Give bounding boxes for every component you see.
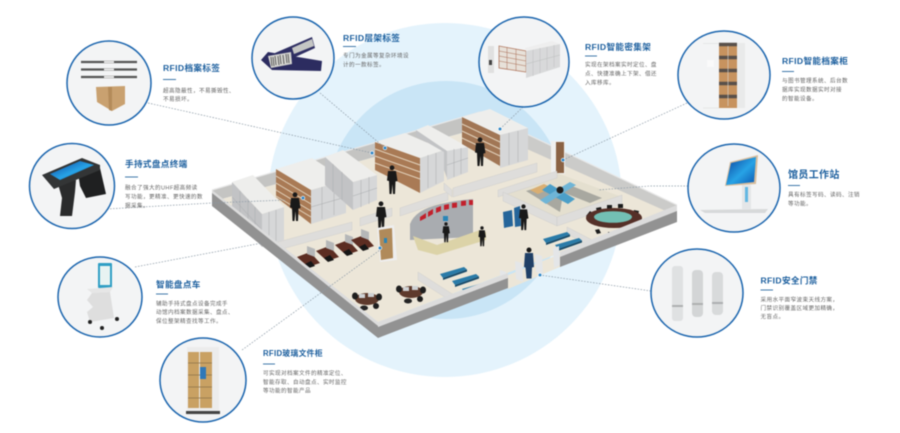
text block: 不易损坏。 <box>163 95 193 103</box>
office room <box>498 171 622 226</box>
connector: inventory cart <box>135 243 262 267</box>
front walls <box>212 190 677 338</box>
icon: archive tag and box <box>67 41 151 125</box>
text block: 辅助手持式盘点设备完成手 <box>156 302 228 308</box>
text block: 动馆内档案数据采集、盘点、 <box>156 308 234 316</box>
text block: 具有标签写码、读码、注销 <box>788 192 860 198</box>
text block: 等功能。 <box>788 200 812 208</box>
shelf D with archive boxes <box>375 133 444 193</box>
text block: 保位整架精查找等工作。 <box>156 317 222 325</box>
text block: 实现在架档案实时定位、盘 <box>585 62 657 68</box>
connector: dense rack <box>500 107 523 129</box>
shelf C closed <box>325 150 377 210</box>
icon: dense rack <box>479 17 569 107</box>
icon: shelf labels <box>252 17 334 99</box>
meeting table <box>586 204 642 236</box>
icon: handheld reader <box>30 144 114 228</box>
door gap floor edge <box>506 254 562 289</box>
panel: RFID archive tag <box>67 41 235 125</box>
heading: RFID安全门禁 <box>760 274 818 286</box>
connector: shelf tag <box>320 93 385 148</box>
low walls around shelf aisles <box>278 163 537 250</box>
reception area <box>410 199 486 255</box>
heading: RFID智能档案柜 <box>782 55 848 66</box>
icon: glass cabinet <box>160 338 246 422</box>
text block: 融合了强大的UHF超高频读 <box>125 186 198 192</box>
heading: 手持式盘点终端 <box>125 158 188 169</box>
panel: handheld inventory terminal <box>30 144 203 228</box>
isometric archive room floor plan <box>212 109 677 338</box>
map location markers <box>301 127 565 277</box>
text block: 可实现对档案文件的精准定位、 <box>263 371 347 377</box>
security gate and visitor <box>500 246 560 284</box>
staff figures near shelves <box>290 137 486 230</box>
kiosks and visitor <box>503 204 528 230</box>
small wooden cabinet <box>551 141 565 174</box>
panel: RFID security gate <box>651 249 838 337</box>
interior partition <box>418 272 457 305</box>
text block: 点、快捷准确上下架、借还 <box>585 70 657 78</box>
text block: 等功能的智能产品 <box>263 386 311 394</box>
icon: inventory cart <box>58 257 142 337</box>
icon: smart cabinet <box>678 31 770 119</box>
heading: RFID档案标签 <box>163 62 220 73</box>
text block: 智能存取、自动盘点、实时监控 <box>263 378 347 386</box>
text block: 超高隐蔽性，不易撕毁性、 <box>163 88 235 94</box>
connector: smart cabinet <box>563 103 687 160</box>
text block: 无盲点。 <box>760 312 784 320</box>
wooden glass cabinet <box>377 225 397 262</box>
panel: RFID glass file cabinet <box>160 338 347 422</box>
text block: 入库移库。 <box>585 78 615 86</box>
connector: handheld terminal <box>107 200 285 209</box>
connector: archive tag <box>148 103 372 153</box>
text block: 门禁识别覆盖区域更加精确， <box>760 304 838 312</box>
text block: 专门为金属等复杂环境设 <box>343 54 409 60</box>
shelf B with archive boxes <box>276 158 346 224</box>
connector: security gate <box>540 275 651 291</box>
icon: security gates <box>651 249 743 337</box>
heading: RFID玻璃文件柜 <box>263 348 323 358</box>
shelf F open <box>462 109 528 168</box>
heading: 馆员工作站 <box>788 168 840 181</box>
round tables <box>352 286 426 310</box>
connector: workstation <box>598 186 688 190</box>
icon: workstation <box>688 144 780 232</box>
text block: 采用水平面窄波束天线方案， <box>760 298 838 304</box>
text block: 计的一款标签。 <box>343 60 385 68</box>
shelf A closed <box>232 175 284 247</box>
panel: librarian workstation <box>688 144 860 232</box>
panel: RFID smart archive cabinet <box>678 31 848 119</box>
study desks <box>297 229 374 268</box>
floor <box>222 128 668 322</box>
panel: smart inventory cart <box>58 257 234 337</box>
text block: 写功能，更精准、更快速的数 <box>125 192 203 200</box>
panel: RFID smart dense rack <box>479 17 657 107</box>
text block: 据库实现数据实时对接 <box>782 86 842 94</box>
connector: glass cabinet <box>242 250 380 350</box>
shelf E closed <box>416 125 468 180</box>
panel: RFID shelf tag <box>252 17 409 99</box>
waiting benches <box>440 232 593 295</box>
heading: RFID层架标签 <box>343 32 400 43</box>
heading: 智能盘点车 <box>156 278 201 290</box>
heading: RFID智能密集架 <box>585 41 651 52</box>
background rings <box>268 23 622 377</box>
text block: 的智能设备。 <box>782 94 818 102</box>
text block: 与图书管理系统、后台数 <box>782 78 848 84</box>
back walls <box>212 112 677 214</box>
text block: 据采集。 <box>125 202 149 210</box>
